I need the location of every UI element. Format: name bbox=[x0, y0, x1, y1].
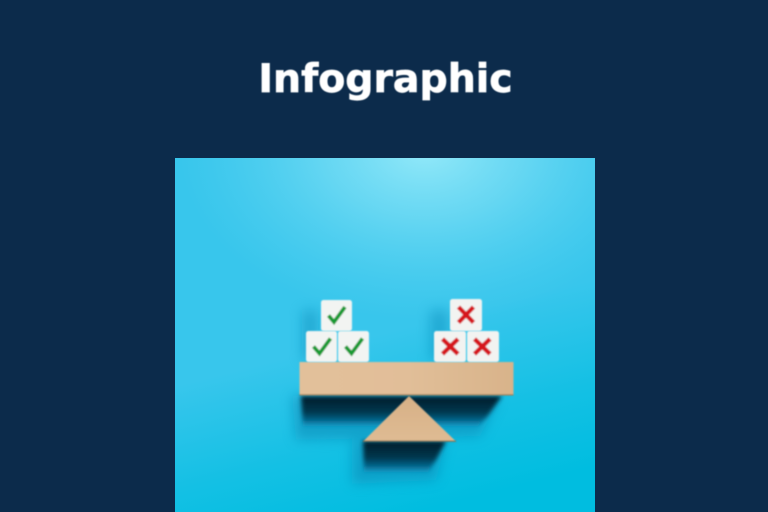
cross cube: bottom left bbox=[434, 331, 466, 362]
photo: balance scale on blue background bbox=[175, 158, 595, 512]
plank shadow bbox=[301, 396, 502, 426]
cross cube: top bbox=[450, 299, 482, 331]
fulcrum shadow bbox=[363, 441, 446, 472]
check cube: bottom right bbox=[338, 331, 369, 362]
title: Infographic bbox=[258, 56, 513, 102]
wooden plank bbox=[300, 362, 514, 396]
soft plank shadow bbox=[292, 396, 500, 484]
cross cube: bottom right bbox=[467, 331, 499, 362]
cube shadows bbox=[302, 310, 448, 360]
check cube: bottom left bbox=[306, 331, 337, 362]
photo background bbox=[175, 158, 595, 512]
wooden triangle fulcrum bbox=[363, 396, 456, 442]
check cube: top bbox=[321, 300, 352, 331]
